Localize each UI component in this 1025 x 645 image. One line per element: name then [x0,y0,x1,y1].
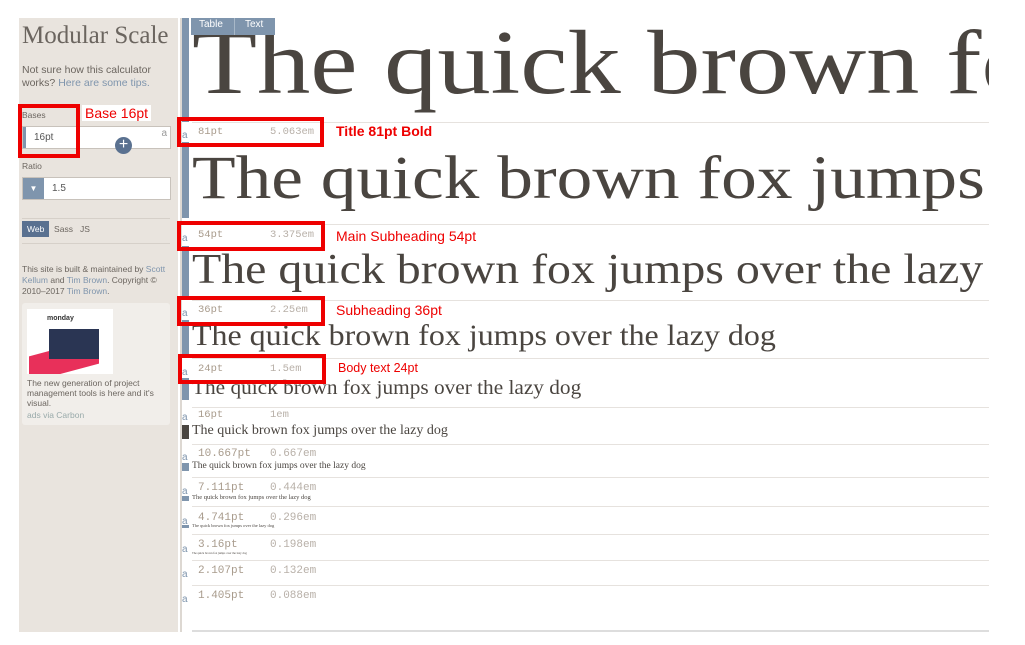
main scale panel: The quick brown fox jumps over the lazy dog [192,551,247,555]
row 54pt label: 54pt [198,229,223,241]
tips text: Not sure how this calculator works? Here are some tips. [22,64,151,89]
main scale panel: The quick brown fox jumps over the lazy dog [192,423,448,438]
row 24pt label [198,363,302,375]
tabs web sass js: Sass JS [54,224,90,234]
row 54pt label [198,229,314,241]
callout: subheading [177,296,325,326]
sidebar [19,18,178,632]
bases input: 16pt [34,132,53,143]
row 81pt label: 81pt [198,126,223,138]
row 3.16pt [198,539,316,551]
row 36pt label [198,304,308,316]
main scale panel: 0.132em [270,565,316,577]
main scale panel: 0.667em [270,448,316,460]
callout label: subheading: Subheading 36pt [336,302,442,318]
credits text: This site is built & maintained by Scott Kellum and Tim Brown. Copyright © 2010–2017 Tim Brown. [22,264,165,296]
plus button [115,137,132,154]
tabs table text [191,18,275,35]
main scale panel: 0.088em [270,590,316,602]
main scale panel: The quick brown fox jumps over the lazy dog [192,523,274,528]
row 7.111pt [198,482,316,494]
row 24pt label: 24pt [198,363,223,375]
ratio input: Ratio [22,161,42,171]
ad panel: The new generation of project management tools is here and it's visual. [27,378,154,408]
main scale panel: 0.444em [270,482,316,494]
row 16pt [198,409,289,421]
row 4.741pt [198,512,316,524]
main scale panel: a [182,233,188,244]
main scale panel: a [182,367,188,378]
row 2.107pt: 2.107pt [198,565,244,577]
tabs table text: Table [199,19,223,30]
main scale panel: 1em [270,409,289,421]
row 4.741pt: 4.741pt [198,512,244,524]
main scale panel: a [182,486,188,497]
main scale panel: a [182,308,188,319]
tabs web sass js: Web [27,224,44,234]
main scale panel [180,18,989,632]
callout: base 16pt [18,104,80,158]
main scale panel: a [182,516,188,527]
main scale panel: a [182,594,188,605]
row 3.16pt: 3.16pt [198,539,238,551]
ad panel: ads via Carbon [27,410,84,420]
main scale panel: The quick brown fox jumps over the lazy dog [192,461,366,471]
ad image [27,309,113,374]
main scale panel: 5.063em [270,126,314,138]
callout label: title: Title 81pt Bold [336,123,432,139]
main scale panel: 1.5em [270,363,302,375]
ratio input: ▼ [30,184,37,193]
bases input: Bases [22,110,46,120]
main scale panel: The quick brown fox jumps over the lazy dog [192,494,311,501]
row 1.405pt [198,590,316,602]
main scale panel: 0.198em [270,539,316,551]
main scale panel: a [182,452,188,463]
row 1.405pt: 1.405pt [198,590,244,602]
main scale panel: 2.25em [270,304,308,316]
row 2.107pt [198,565,316,577]
callout: body text [178,354,326,384]
row 7.111pt: 7.111pt [198,482,244,494]
bases input [22,110,171,154]
sidebar title: Modular Scale [22,22,168,49]
row 10.667pt [198,448,316,460]
main scale panel: a [182,130,188,141]
row 81pt label [198,126,314,138]
plus button: + [119,136,128,153]
main scale panel: a [182,412,188,423]
sample 24pt: The quick brown fox jumps over the lazy dog [192,319,776,352]
row 36pt label: 36pt [198,304,223,316]
callout: main subheading [177,221,325,251]
ad panel [22,303,170,425]
main scale panel: 3.375em [270,229,314,241]
callout label: base 16pt: Base 16pt [85,105,148,121]
callout: title 81pt [177,117,324,147]
bases input: a [161,128,167,139]
ratio input: 1.5 [52,183,66,194]
row 10.667pt: 10.667pt [198,448,251,460]
callout label: body text: Body text 24pt [338,361,418,375]
main scale panel: a [182,544,188,555]
ratio input [22,161,171,200]
tabs web sass js [22,221,90,237]
callout label: main subheading: Main Subheading 54pt [336,228,476,244]
sample 16pt: The quick brown fox jumps over the lazy dog [192,377,581,399]
ad image: monday [47,315,74,322]
row 16pt: 16pt [198,409,223,421]
tabs table text: Text [245,19,263,30]
main scale panel: 0.296em [270,512,316,524]
main scale panel: a [182,569,188,580]
